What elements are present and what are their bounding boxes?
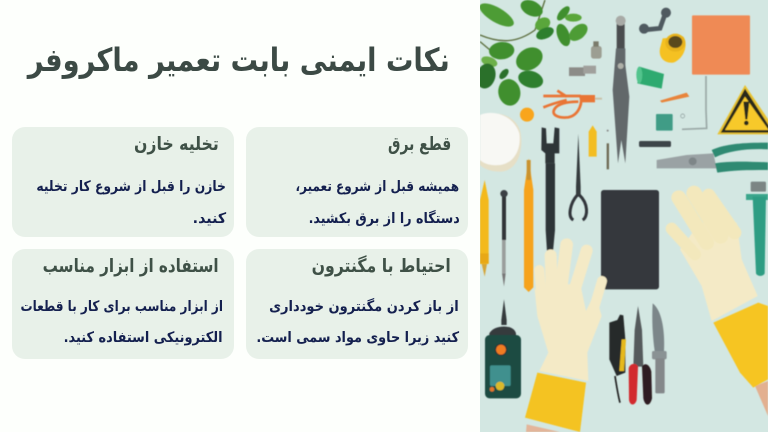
icon: white jar (480, 113, 521, 172)
illustration: tools and gloves (480, 0, 768, 432)
icon: yellow pens (480, 158, 533, 292)
icon: right glove (672, 193, 768, 416)
icon: wire hook (682, 76, 707, 129)
icon: left glove (525, 245, 602, 432)
card: power off (246, 127, 468, 237)
card: proper tools (12, 249, 234, 359)
orange pencil (660, 93, 689, 103)
icon: yellow marker (589, 125, 597, 157)
icon: green cylinder (636, 67, 664, 89)
icon: scissors (570, 134, 587, 220)
card: magnetron caution (246, 249, 468, 359)
title: نکات ایمنی بابت تعمیر ماکروفر (28, 41, 450, 79)
orange cap (520, 108, 534, 122)
card text line 1: از ابزار مناسب برای کار با قطعات (21, 299, 223, 315)
card text line 2: کنید زیرا حاوی مواد سمی است. (256, 330, 459, 346)
card heading: قطع برق (388, 134, 451, 155)
icon: green tool right (746, 182, 768, 276)
dark cylinder (639, 141, 671, 147)
icon: yellow jar (660, 34, 686, 63)
icon: black wire stripper (541, 127, 559, 251)
icon: knife (652, 303, 667, 393)
card text line 1: خازن را قبل از شروع کار تخلیه (37, 179, 226, 195)
icon: orange cloth (692, 15, 750, 75)
card heading: تخلیه خازن (134, 134, 219, 155)
icon: red handled pliers (629, 306, 652, 405)
icon: grey hook (641, 10, 669, 31)
icon: long compass pliers (613, 16, 629, 163)
icon: tablet (601, 190, 659, 289)
card heading: احتیاط با مگنترون (312, 256, 451, 277)
card text line 2: دستگاه را از برق بکشید. (309, 211, 460, 227)
left panel (0, 0, 480, 432)
icon: orange cable (543, 91, 602, 118)
icon: black yellow tool (609, 315, 626, 403)
icon: leaves (474, 0, 591, 107)
card text line 1: از باز کردن مگنترون خودداری (269, 299, 459, 315)
card heading: استفاده از ابزار مناسب (43, 256, 219, 277)
icon: green pliers (657, 143, 768, 173)
icon: warning sign (717, 85, 768, 134)
icon: multimeter (485, 299, 521, 398)
card text line 2: کنید. (193, 211, 226, 227)
card: discharge capacitor (12, 127, 234, 237)
card text line 2: الکترونیکی استفاده کنید. (64, 330, 223, 346)
card text line 1: همیشه قبل از شروع تعمیر، (295, 179, 459, 195)
small metal parts (569, 41, 685, 169)
green block (656, 114, 673, 131)
thin screwdriver (500, 190, 508, 287)
